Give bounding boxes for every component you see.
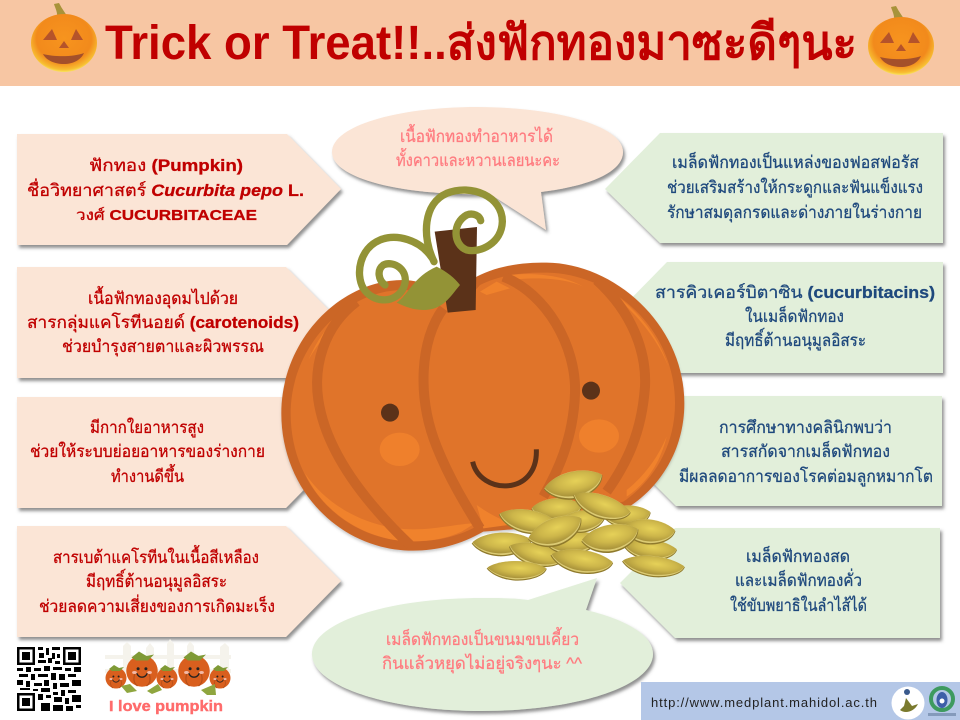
illustration: pile of pumpkin seeds — [472, 466, 686, 582]
callout: savoury and sweet: ทั้งคาวและหวานเลยนะคะ — [396, 148, 560, 170]
icon: jack-o-lantern right — [868, 6, 934, 75]
cheeks — [380, 419, 619, 466]
panel: deworming: เมล็ดฟักทองสด — [746, 545, 850, 566]
QR code — [17, 647, 81, 711]
illustration: five smiling pumpkins — [105, 639, 231, 715]
callout: seed snack — [312, 578, 653, 711]
panel: fibre — [17, 397, 341, 508]
panel: clinical study: สารสกัดจากเมล็ดฟักทอง — [721, 440, 890, 461]
panel: beta-carotene — [17, 526, 341, 637]
illustration: pumpkin character — [281, 190, 684, 551]
stem — [435, 227, 477, 313]
fence — [105, 639, 231, 673]
panel: pumpkin identity: ฟักทอง (Pumpkin) — [89, 156, 243, 175]
callout: seed snack: กินแล้วหยุดไม่อยู่จริงๆนะ ^^ — [382, 653, 582, 674]
panel: fibre: ช่วยให้ระบบย่อยอาหารของร่างกาย — [30, 441, 265, 461]
panel: clinical study: การศึกษาทางคลินิกพบว่า — [719, 418, 892, 437]
panel: pumpkin identity: ชื่อวิทยาศาสตร์ Cucurbita pepo L. — [27, 178, 304, 200]
footer bar — [641, 682, 960, 720]
panel: pumpkin identity: วงศ์ CUCURBITACEAE — [76, 207, 257, 224]
panel: beta-carotene: ช่วยลดความเสี่ยงของการเกิดมะเร็ง — [39, 594, 275, 616]
panel: phosphorus: รักษาสมดุลกรดและด่างภายในร่างกาย — [667, 202, 922, 223]
website link: http://www.medplant.mahidol.ac.th — [651, 695, 877, 710]
panel: cucurbitacins — [612, 262, 943, 373]
callout: savoury and sweet — [332, 107, 623, 230]
header banner — [0, 0, 960, 86]
title: Trick or Treat!!..ส่งฟักทองมาซะดีๆนะ — [105, 17, 857, 70]
mouth — [473, 449, 536, 486]
vines — [359, 190, 502, 300]
panel: phosphorus — [605, 133, 943, 243]
panel: fibre: ทำงานดีขึ้น — [111, 464, 184, 486]
panel: cucurbitacins: สารคิวเคอร์บิตาซิน (cucurbitacins) — [655, 283, 935, 302]
panel: carotenoids: เนื้อฟักทองอุดมไปด้วย — [88, 286, 238, 309]
panel: cucurbitacins: ในเมล็ดฟักทอง — [745, 305, 844, 326]
callout: seed snack: เมล็ดฟักทองเป็นขนมขบเคี้ยว — [386, 627, 579, 649]
panel: fibre: มีกากใยอาหารสูง — [90, 417, 204, 438]
panel: clinical study — [621, 396, 942, 506]
panel: phosphorus: ช่วยเสริมสร้างให้กระดูกและฟันแข็งแรง — [667, 176, 923, 198]
panel: beta-carotene: สารเบต้าแคโรทีนในเนื้อสีเหลือง — [53, 545, 259, 567]
panel: cucurbitacins: มีฤทธิ์ต้านอนุมูลอิสระ — [725, 328, 866, 351]
panel: phosphorus: เมล็ดฟักทองเป็นแหล่งของฟอสฟอรัส — [672, 151, 920, 172]
panel: pumpkin identity — [17, 134, 341, 245]
panel: deworming: ใช้ขับพยาธิในลำไส้ได้ — [730, 595, 867, 615]
caption: I love pumpkin — [109, 698, 223, 715]
panel: carotenoids: ช่วยบำรุงสายตาและผิวพรรณ — [62, 337, 264, 357]
logo: green emblem — [928, 688, 956, 716]
callout: savoury and sweet: เนื้อฟักทองทำอาหารได้ — [400, 124, 553, 146]
leaf — [397, 267, 460, 310]
eyes — [381, 382, 600, 422]
icon: jack-o-lantern left — [31, 3, 97, 72]
panel: deworming: และเมล็ดฟักทองคั่ว — [735, 568, 862, 590]
panel: clinical study: มีผลลดอาการของโรคต่อมลูกหมากโต — [679, 466, 933, 487]
panel: carotenoids: สารกลุ่มแคโรทีนอยด์ (carotenoids) — [27, 312, 299, 333]
logo: anniversary seal — [892, 686, 924, 720]
panel: carotenoids — [17, 267, 341, 378]
panel: deworming — [620, 528, 940, 638]
panel: beta-carotene: มีฤทธิ์ต้านอนุมูลอิสระ — [86, 569, 227, 592]
